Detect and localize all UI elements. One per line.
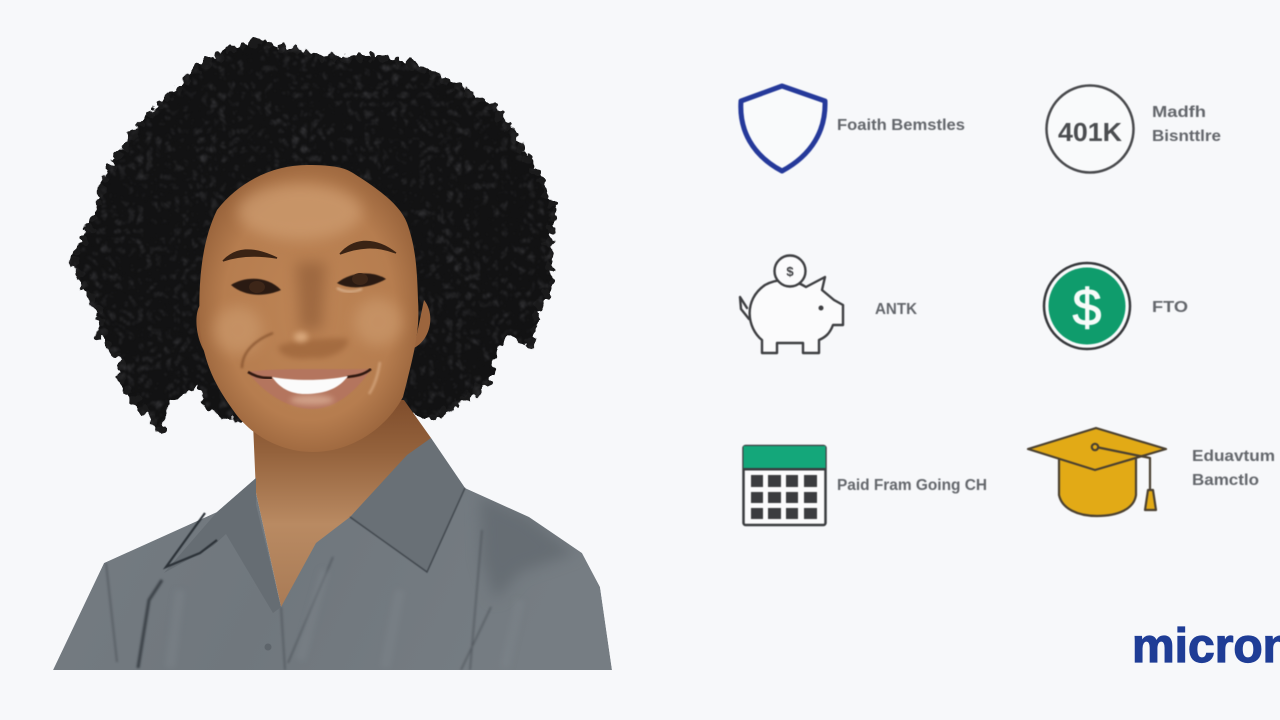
icon: graduation cap xyxy=(1028,428,1166,516)
lips xyxy=(248,369,371,409)
label: 401K benefit: Madfh xyxy=(1152,104,1206,121)
cheek crease highlight xyxy=(369,362,380,394)
teeth xyxy=(272,376,348,394)
right collar xyxy=(350,438,465,572)
icon: green dollar coin: $ xyxy=(1073,279,1102,337)
left collar fold lines xyxy=(166,513,217,567)
left collar xyxy=(164,478,281,613)
icon: green dollar coin xyxy=(1044,263,1130,349)
collar shadow xyxy=(350,488,465,572)
label: piggy bank benefit: ANTK xyxy=(875,301,917,318)
icon: 401K circle xyxy=(1046,86,1134,172)
eyes xyxy=(231,273,386,295)
icon: calendar xyxy=(744,446,826,525)
label: 401K benefit second line: Bisnttlre xyxy=(1152,128,1221,145)
cheek highlights xyxy=(214,306,262,354)
neck xyxy=(252,400,431,607)
label: calendar benefit: Paid Fram Going CH xyxy=(837,477,987,494)
label: shield benefit: Foaith Bemstles xyxy=(837,117,965,134)
label: dollar benefit: FTO xyxy=(1152,299,1188,316)
nose bridge shadow xyxy=(296,262,326,330)
icon: shield xyxy=(741,86,825,171)
icon: piggy bank: $ xyxy=(786,264,794,279)
eyebrows xyxy=(223,241,396,261)
shirt xyxy=(53,438,612,670)
smile line and lower lip highlight xyxy=(248,369,371,378)
smile creases xyxy=(242,333,273,368)
hair xyxy=(73,42,555,430)
shirt folds xyxy=(106,530,491,670)
shirt button xyxy=(264,644,272,650)
ears xyxy=(196,300,430,360)
label: education benefit second line: Bamctlo xyxy=(1192,472,1259,489)
icon: 401K circle: 401K xyxy=(1058,117,1122,147)
nose xyxy=(278,338,348,359)
label: education benefit: Eduavtum xyxy=(1192,448,1275,465)
dark shirt fold xyxy=(138,580,162,668)
shoulder shading xyxy=(480,495,575,600)
fabric highlights xyxy=(310,573,326,610)
forehead highlight xyxy=(238,184,362,240)
face xyxy=(199,165,418,452)
portrait photo of smiling woman xyxy=(53,42,612,670)
icon: piggy bank xyxy=(740,256,843,353)
